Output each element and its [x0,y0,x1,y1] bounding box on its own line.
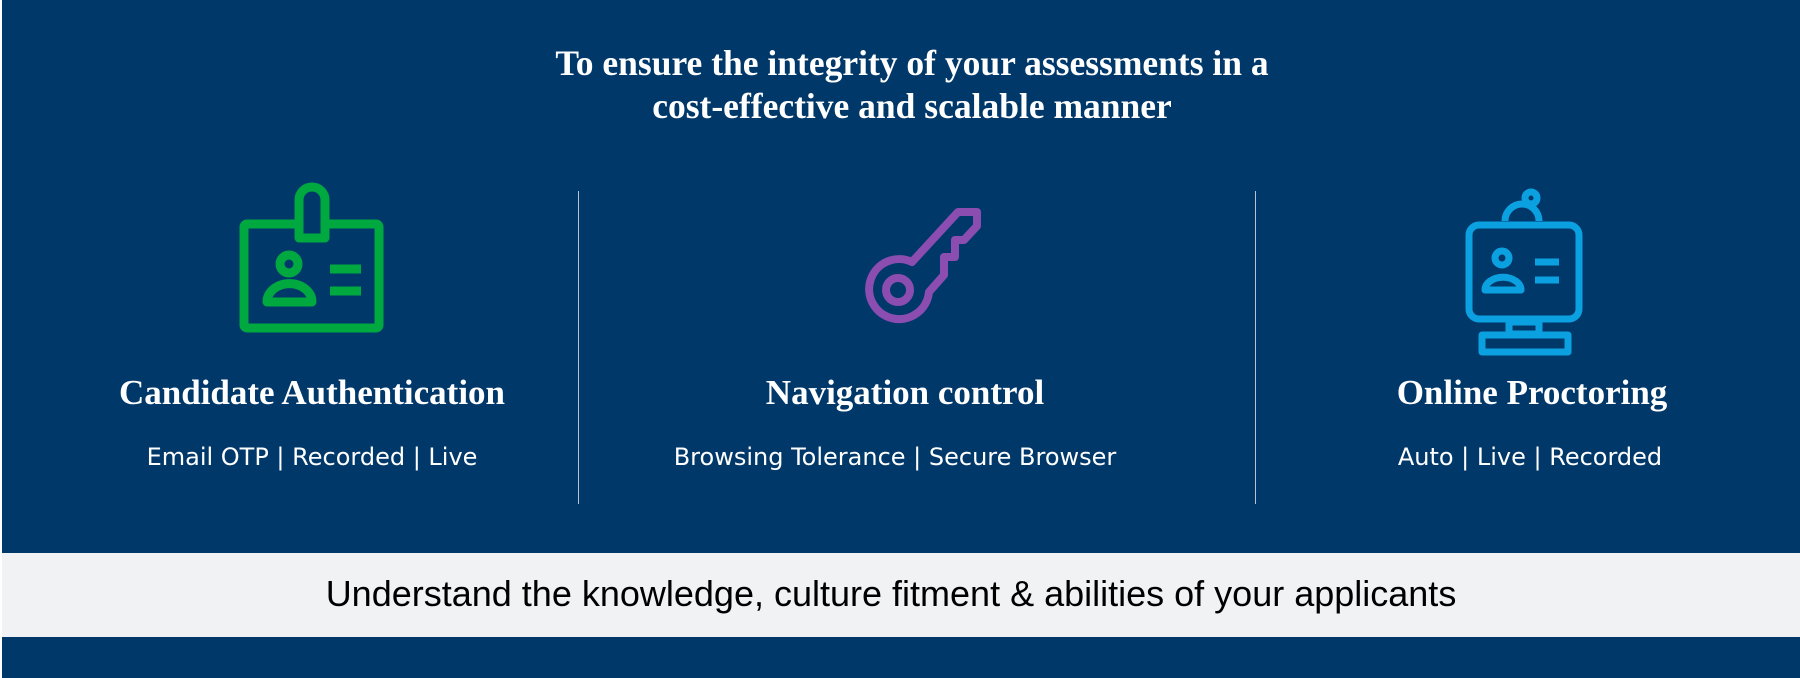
bottom banner [2,553,1800,637]
title: To ensure the integrity of your assessments in a [555,43,1269,83]
title [555,43,1269,126]
title: cost-effective and scalable manner [652,86,1172,126]
icon: key [865,208,981,324]
subtext: Browsing Tolerance | Secure Browser [674,443,1116,471]
heading: Candidate Authentication [119,373,505,412]
icon: monitor [1466,188,1582,356]
banner text: Understand the knowledge, culture fitment & abilities of your applicants [326,573,1456,614]
panel: candidate authentication [119,182,505,471]
subtext: Auto | Live | Recorded [1398,443,1662,471]
panel: navigation control [674,208,1116,471]
heading: Navigation control [766,373,1044,412]
subtext: Email OTP | Recorded | Live [147,443,477,471]
heading: Online Proctoring [1397,373,1667,412]
panel: online proctoring [1397,188,1667,471]
icon: id badge [240,182,384,332]
